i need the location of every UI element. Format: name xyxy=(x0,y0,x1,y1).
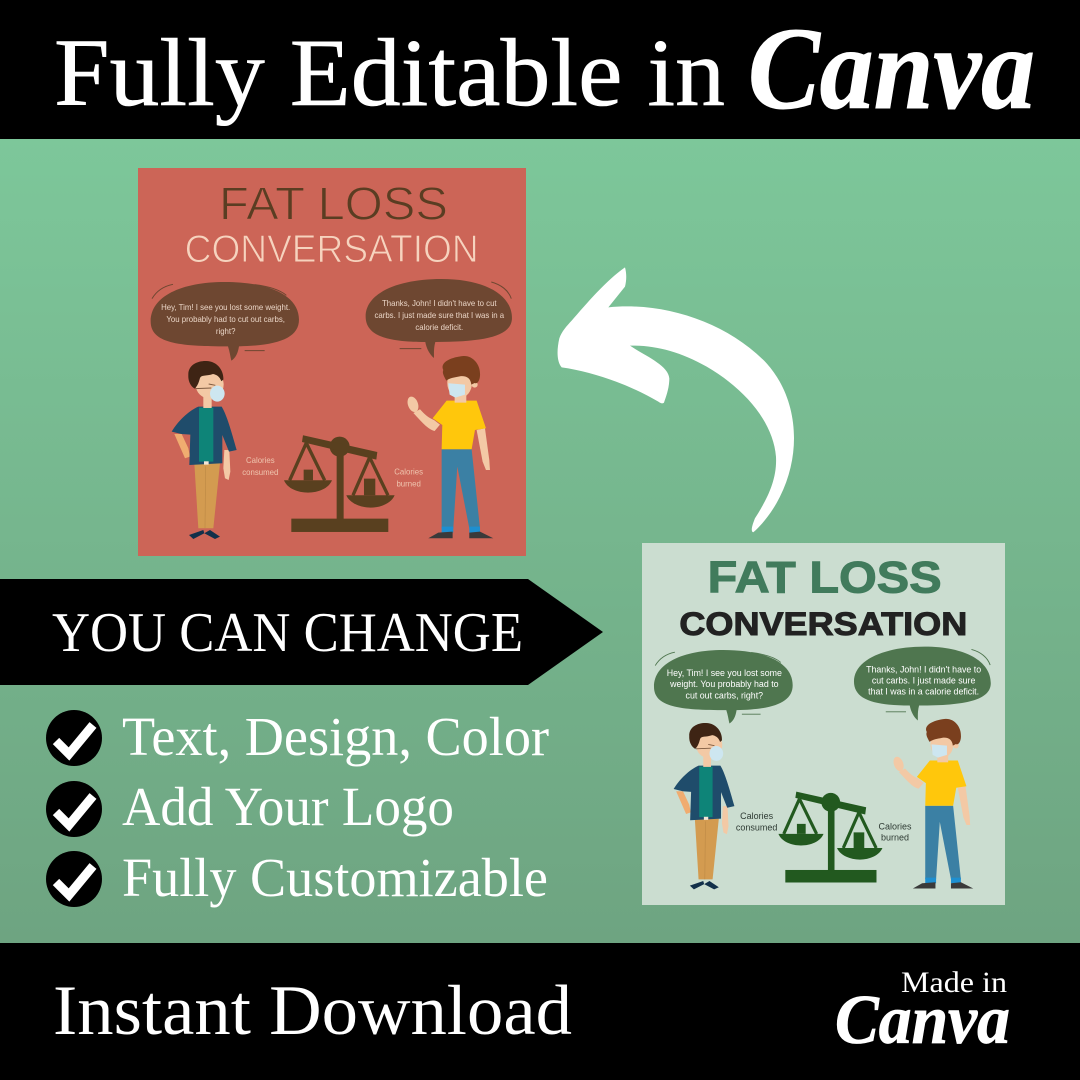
speech bubble: left xyxy=(654,650,793,724)
speech bubble: right xyxy=(854,647,991,721)
label: calories burned: Calories xyxy=(878,821,912,831)
character: Tim xyxy=(674,723,734,889)
speech bubble: left: Hey, Tim! I see you lost some xyxy=(667,668,782,678)
heading: fat loss: FAT LOSS xyxy=(708,554,942,603)
label: calories burned: burned xyxy=(881,833,909,843)
check item: add your logo: Add Your Logo xyxy=(122,776,454,837)
banner: you can change: YOU CAN CHANGE xyxy=(52,602,523,664)
speech bubble: left: Hey, Tim! I see you lost some weight. xyxy=(161,303,290,312)
label: calories consumed: Calories xyxy=(740,811,774,821)
headline: Fully Editable in xyxy=(54,19,725,126)
speech bubble: right: Thanks, John! I didn't have to cut xyxy=(382,299,497,308)
character: Tim xyxy=(172,361,237,539)
Canva wordmark: Canva xyxy=(748,3,1035,134)
scale icon xyxy=(284,435,395,532)
top banner xyxy=(0,0,1080,139)
label: calories consumed: Calories xyxy=(246,456,275,465)
heading: fat loss: FAT LOSS xyxy=(219,178,448,230)
speech bubble: right: calorie deficit. xyxy=(415,323,463,332)
character: John xyxy=(892,719,973,888)
Canva wordmark small: Canva xyxy=(835,982,1010,1059)
background xyxy=(0,139,1080,943)
character: John xyxy=(406,356,493,538)
heading: conversation: CONVERSATION xyxy=(679,605,967,642)
label: calories consumed: consumed xyxy=(736,822,777,832)
banner: you can change xyxy=(0,579,603,685)
heading: conversation: CONVERSATION xyxy=(185,227,479,271)
label: calories burned: burned xyxy=(396,479,421,488)
instant download: Instant Download xyxy=(53,972,572,1050)
check item: fully customizable: Fully Customizable xyxy=(122,847,548,908)
speech bubble: right: Thanks, John! I didn't have to xyxy=(866,664,981,674)
speech bubble: left: weight. You probably had to xyxy=(669,679,779,689)
label: calories consumed: consumed xyxy=(242,468,278,477)
speech bubble: left: You probably had to cut out carbs, xyxy=(166,315,285,324)
curved arrow xyxy=(558,267,794,532)
speech bubble: right: cut carbs. I just made sure xyxy=(872,675,975,685)
speech bubble: left: right? xyxy=(216,327,236,336)
label: calories burned: Calories xyxy=(394,467,423,476)
speech bubble: left: cut out carbs, right? xyxy=(686,690,763,700)
panel: red template preview xyxy=(138,168,526,556)
scale icon xyxy=(778,792,882,882)
speech bubble: right: that I was in a calorie deficit. xyxy=(868,687,979,697)
speech bubble: right xyxy=(366,279,512,358)
check item: text, design, color: Text, Design, Color xyxy=(122,706,549,767)
panel: green template preview xyxy=(642,543,1005,905)
bottom banner xyxy=(0,943,1080,1080)
made in: Made in xyxy=(901,966,1007,999)
checklist xyxy=(46,706,549,908)
speech bubble: right: carbs. I just made sure that I was in a xyxy=(374,311,505,320)
speech bubble: left xyxy=(151,282,299,361)
